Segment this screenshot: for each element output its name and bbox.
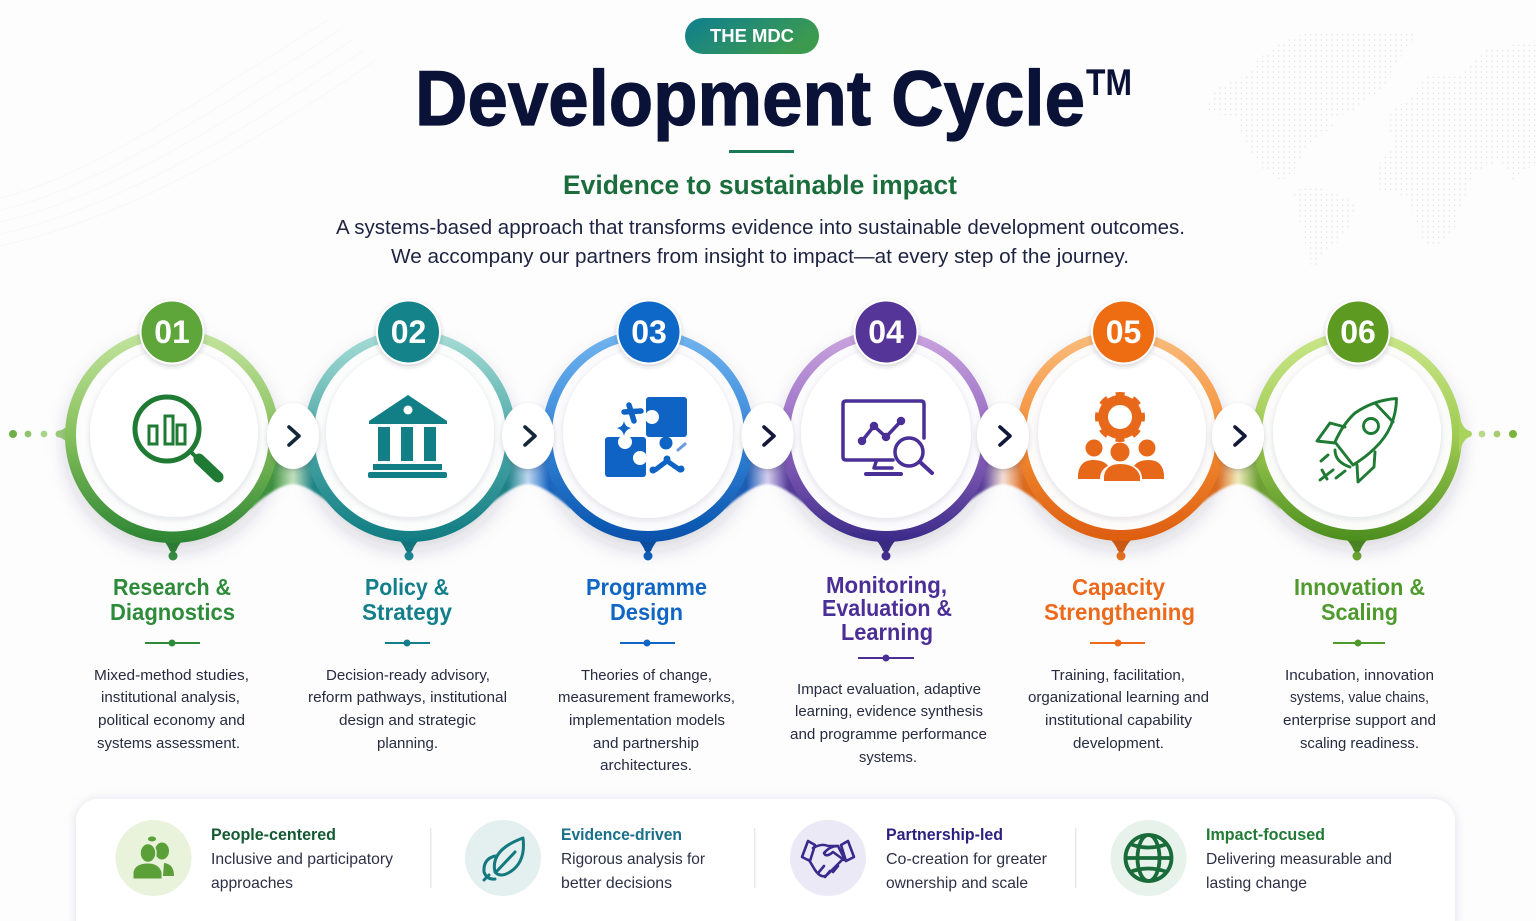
panel: principles [76, 799, 1455, 921]
text [886, 826, 1048, 892]
text: approaches [211, 875, 293, 892]
arrow 5 [1212, 403, 1264, 469]
ring [1252, 331, 1462, 541]
title: Development Cycle [415, 54, 1085, 142]
divider [145, 640, 200, 646]
text: Rigorous analysis for [561, 851, 706, 868]
text: better decisions [561, 875, 672, 892]
arrow 2 [502, 403, 554, 469]
icon: monitor with chart and magnifier [843, 401, 932, 474]
heading: Strategy [362, 599, 452, 625]
description: institutional analysis, [101, 689, 240, 706]
description: and partnership [593, 735, 699, 752]
step 5 text [1028, 574, 1209, 752]
heading: Design [610, 599, 683, 625]
step 1 circle [65, 300, 279, 560]
icon: handshake [790, 820, 866, 896]
number badge [1326, 300, 1390, 364]
description: implementation models [569, 712, 725, 729]
text [1206, 826, 1392, 892]
description: Theories of change, [581, 667, 712, 684]
description [1028, 667, 1209, 752]
step 6 circle [1252, 300, 1462, 560]
description: design and strategic [339, 712, 476, 729]
text: Partnership-led [886, 826, 1003, 844]
lead-in dots left [9, 416, 72, 454]
description: organizational learning and [1028, 689, 1209, 706]
divider [1090, 640, 1145, 646]
arrow buttons [267, 403, 1264, 469]
description: measurement frameworks, [558, 689, 735, 706]
description [1283, 667, 1436, 752]
description: Decision-ready advisory, [326, 667, 490, 684]
icon: globe [1110, 820, 1186, 896]
text: Impact-focused [1206, 826, 1325, 844]
card [76, 799, 1455, 921]
step 4 text [790, 572, 987, 766]
step 2 circle [304, 300, 516, 560]
heading [110, 574, 235, 625]
description: political economy and [98, 712, 245, 729]
description: development. [1073, 735, 1164, 752]
heading [1044, 574, 1195, 625]
number badge: 02 [391, 314, 426, 350]
description: scaling readiness. [1300, 735, 1419, 752]
heading: Research & [113, 574, 231, 600]
number badge: 05 [1106, 314, 1141, 350]
ring [304, 330, 516, 542]
heading: Policy & [365, 574, 449, 600]
intro paragraph: We accompany our partners from insight to impact—at every step of the journey. [391, 246, 1129, 268]
ring [1016, 331, 1226, 541]
text: Evidence-driven [561, 826, 682, 844]
number badge: 01 [154, 314, 190, 350]
principle: partnership-led [790, 820, 1048, 896]
description: institutional capability [1045, 712, 1193, 729]
description [94, 667, 249, 752]
intro paragraph [336, 217, 1185, 268]
arrow 3 [742, 403, 794, 469]
heading: Scaling [1321, 599, 1398, 625]
icon: rocket [1317, 398, 1396, 482]
pill label [685, 18, 819, 54]
number badge [1091, 300, 1156, 364]
trademark: TM [1086, 62, 1132, 103]
description: architectures. [600, 757, 692, 774]
ring [542, 330, 754, 542]
description [308, 667, 507, 752]
principle: people-centered [116, 820, 393, 896]
step 6 text [1283, 574, 1436, 752]
intro paragraph: A systems-based approach that transforms evidence into sustainable development outcomes. [336, 217, 1185, 239]
description: systems, value chains, [1290, 689, 1429, 706]
principle: evidence-driven [465, 820, 706, 896]
description: Impact evaluation, adaptive [797, 681, 981, 698]
heading: Learning [841, 619, 933, 645]
description [790, 681, 987, 766]
text: ownership and scale [886, 875, 1028, 892]
cycle connectors [250, 455, 1281, 509]
step 2 text [308, 574, 507, 752]
text: Delivering measurable and [1206, 851, 1392, 868]
icon: magnifier with bars [135, 397, 218, 477]
icon: people [116, 820, 192, 896]
divider [858, 654, 914, 662]
text [211, 826, 393, 892]
description: reform pathways, institutional [308, 689, 507, 706]
icon: puzzle pieces [605, 397, 687, 477]
step 3 text [558, 574, 735, 774]
heading: Capacity [1072, 574, 1165, 600]
number badge: 04 [868, 314, 904, 350]
arrow 4 [977, 403, 1029, 469]
text: People-centered [211, 826, 336, 844]
step 3 circle [542, 300, 754, 560]
heading: Evaluation & [822, 595, 952, 621]
heading: Programme [586, 574, 707, 600]
text: Inclusive and participatory [211, 851, 393, 868]
step 4 circle [780, 300, 992, 560]
description [558, 667, 735, 774]
description: systems. [859, 749, 917, 766]
divider [385, 640, 430, 646]
description: learning, evidence synthesis [795, 703, 983, 720]
text: Co-creation for greater [886, 851, 1048, 868]
text: lasting change [1206, 875, 1307, 892]
number badge: 06 [1340, 314, 1376, 350]
heading: Innovation & [1294, 574, 1425, 600]
title rule [729, 150, 794, 153]
ring [65, 329, 279, 543]
step 5 circle [1016, 300, 1226, 560]
description: Incubation, innovation [1285, 667, 1434, 684]
lead-out dots right [1459, 416, 1517, 454]
heading [586, 574, 707, 625]
step 1 text [94, 574, 249, 752]
arrow 1 [267, 403, 319, 469]
divider [620, 640, 675, 646]
description: systems assessment. [97, 735, 240, 752]
description: Mixed-method studies, [94, 667, 249, 684]
number badge [140, 300, 204, 364]
icon: gear above team [1078, 394, 1164, 481]
text [561, 826, 706, 892]
description: and programme performance [790, 726, 987, 743]
number badge: 03 [631, 314, 667, 350]
world map dot pattern [1207, 33, 1536, 273]
heading: Monitoring, [826, 572, 947, 598]
heading [362, 574, 452, 625]
ring [780, 330, 992, 542]
subtitle: Evidence to sustainable impact [563, 170, 957, 200]
number badge [616, 300, 682, 364]
pill label: THE MDC [710, 26, 794, 46]
icon: institution building [368, 395, 447, 478]
number badge [854, 300, 918, 364]
divider [1333, 640, 1385, 646]
heading [822, 572, 952, 645]
header [336, 18, 1185, 268]
heading: Diagnostics [110, 599, 235, 625]
description: planning. [377, 735, 438, 752]
principle: impact-focused [1110, 820, 1392, 896]
description: enterprise support and [1283, 712, 1436, 729]
icon: leaf [465, 820, 541, 896]
heading: Strengthening [1044, 599, 1195, 625]
decorative flowing lines [0, 20, 376, 246]
number badge [376, 300, 441, 364]
heading [1294, 574, 1425, 625]
description: Training, facilitation, [1051, 667, 1185, 684]
